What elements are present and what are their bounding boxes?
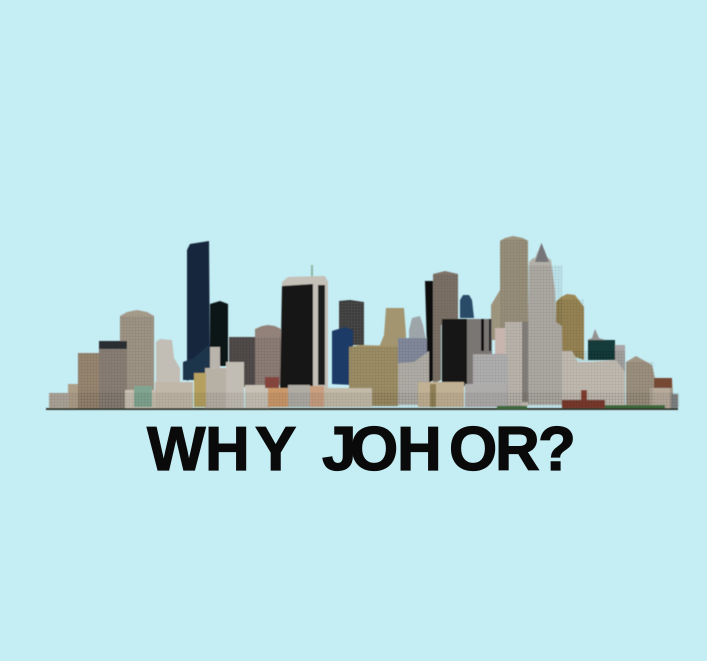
title: WHY JOHOR? [147, 415, 576, 484]
grey slab buildings [398, 338, 429, 405]
far-left tan towers [78, 310, 180, 409]
olive block [349, 345, 398, 406]
tall brown tower with black side [425, 271, 458, 384]
city skyline illustration [46, 236, 679, 410]
black office block [442, 319, 492, 386]
central dark and blue towers [332, 300, 364, 385]
olive tower behind [378, 308, 426, 350]
golden right tower [556, 294, 584, 360]
right stepped blocks [562, 329, 678, 409]
pale tower cluster [473, 322, 528, 406]
tan striped tower [491, 236, 528, 350]
low foreground buildings left and centre [49, 347, 679, 409]
black tower with white frame [280, 265, 328, 392]
red brick low building [562, 390, 605, 408]
gothic spire tower [523, 243, 563, 405]
dark blue glass tower [183, 241, 228, 381]
ground line [46, 405, 678, 410]
brown mid towers [229, 325, 281, 387]
blue dome tower [460, 295, 474, 318]
